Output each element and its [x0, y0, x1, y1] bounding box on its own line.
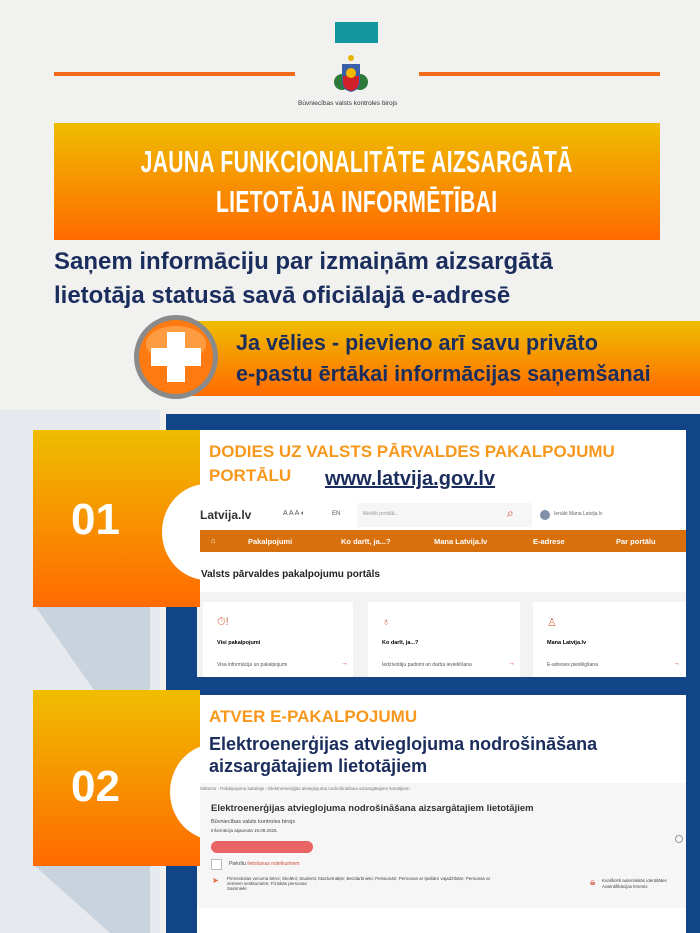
screenshot nav bar: ⌂ [211, 536, 216, 545]
service screenshot: Elektroenerģijas atvieglojuma nodrošināšana aizsargātajiem lietotājiem [211, 803, 534, 814]
screenshot nav bar [197, 530, 686, 552]
service screenshot: Sākums › Pakalpojumu katalogs › Elektroenerģijas atvieglojuma nodrošināšana aizsargātajiem lietotājiem [200, 786, 410, 791]
step 1 number block [33, 430, 200, 607]
title banner: LIETOTĀJA INFORMĒTĪBAI [216, 184, 498, 218]
subtitle: Saņem informāciju par izmaiņām aizsargātā [54, 248, 553, 275]
screenshot header [200, 503, 602, 527]
screenshot nav bar: Ko darīt, ja...? [341, 537, 391, 546]
plus banner text [236, 330, 651, 386]
screenshot header: A A A ◐ [283, 510, 305, 517]
url: www.latvija.gov.lv [325, 468, 495, 490]
service screenshot: 🔒︎ [590, 877, 595, 888]
plus banner text: Ja vēlies - pievieno arī savu privāto [236, 330, 598, 355]
screenshot header: Meklēt portālā... [363, 511, 399, 517]
step 2 heading: ATVER E-PAKALPOJUMU [209, 707, 417, 726]
plus banner text: e-pastu ērtākai informācijas saņemšanai [236, 361, 651, 386]
screenshot header: ⌕ [507, 506, 514, 520]
title banner [54, 123, 660, 240]
step 2 number block [33, 690, 200, 866]
screenshot heading: Valsts pārvaldes pakalpojumu portāls [201, 569, 380, 580]
service screenshot: Pirmsskolas vecuma bērni; Skolēni; Studenti; Mazturīnāķie; Bezdarbnieki; Pensionāri; Personas ar īpašām vajadzībām; Personas ar [227, 876, 490, 881]
decorative lines [54, 72, 295, 76]
screenshot cards: E-adreses pieslēgšana [547, 662, 598, 668]
screenshot header: Latvija.lv [200, 508, 251, 522]
step 2 number block: 02 [71, 762, 120, 811]
screenshot cards: ♙ [547, 617, 557, 629]
logo: coat of arms [334, 55, 368, 92]
service screenshot: Būvniecības valsts kontroles birojs [211, 819, 295, 825]
subtitle [54, 248, 553, 309]
screenshot cards: Visi pakalpojumi [217, 640, 260, 646]
screenshot cards: Ko darīt, ja...? [382, 640, 418, 646]
logo caption: Būvniecības valsts kontroles birojs [298, 100, 397, 107]
service screenshot: zemiem ienākumiem; Fiziskās personas [227, 881, 307, 886]
step 1 number block: 01 [71, 495, 120, 544]
screenshot cards: → [508, 660, 515, 667]
screenshot nav bar: Mana Latvija.lv [434, 537, 487, 546]
service title: Elektroenerģijas atvieglojuma nodrošināšana [209, 734, 597, 754]
service screenshot: Kvalificēti autentiskās identitātes [602, 878, 667, 883]
screenshot cards [197, 592, 686, 677]
service screenshot: Saimnieki [227, 886, 247, 891]
screenshot cards: Mana Latvija.lv [547, 640, 586, 646]
icon: plus circle [134, 315, 218, 399]
screenshot cards: Iedzīvotāju padomi un darba ievietēšana [382, 662, 472, 668]
service screenshot [197, 783, 686, 908]
screenshot nav bar: Pakalpojumi [248, 537, 292, 546]
screenshot cards: Visa informācija un pakalpojumi [217, 662, 287, 668]
service screenshot: Informācija atjaunota 19.09.2025. [211, 828, 278, 833]
screenshot cards: ⏱! [217, 616, 229, 628]
screenshot header: Ienākt Mana Latvija.lv [554, 511, 602, 517]
screenshot cards: → [673, 660, 680, 667]
step 1 heading: PORTĀLU [209, 466, 291, 485]
step 1 heading [209, 442, 615, 485]
screenshot cards: → [341, 660, 348, 667]
step 2 panel [197, 695, 686, 933]
screenshot cards: ♁ [382, 616, 390, 628]
screenshot nav bar: Par portālu [616, 537, 656, 546]
screenshot nav bar: E-adrese [533, 537, 565, 546]
blue frame [166, 414, 700, 933]
service screenshot: Piekrītu lietošanas noteikumiem [229, 861, 300, 867]
plus banner [190, 321, 700, 396]
step 1 heading: DODIES UZ VALSTS PĀRVALDES PAKALPOJUMU [209, 442, 615, 461]
service screenshot: Autentifikācijas līmenis [602, 884, 648, 889]
step 1 panel [197, 430, 686, 677]
title banner: JAUNA FUNKCIONALITĀTE AIZSARGĀTĀ [141, 144, 573, 178]
teal marker [335, 22, 378, 43]
service title: aizsargātajiem lietotājiem [209, 756, 427, 776]
screenshot header: EN [332, 511, 340, 517]
service title [209, 734, 598, 776]
service screenshot: ➤ [212, 876, 219, 885]
subtitle: lietotāja statusā savā oficiālajā e-adresē [54, 282, 510, 309]
